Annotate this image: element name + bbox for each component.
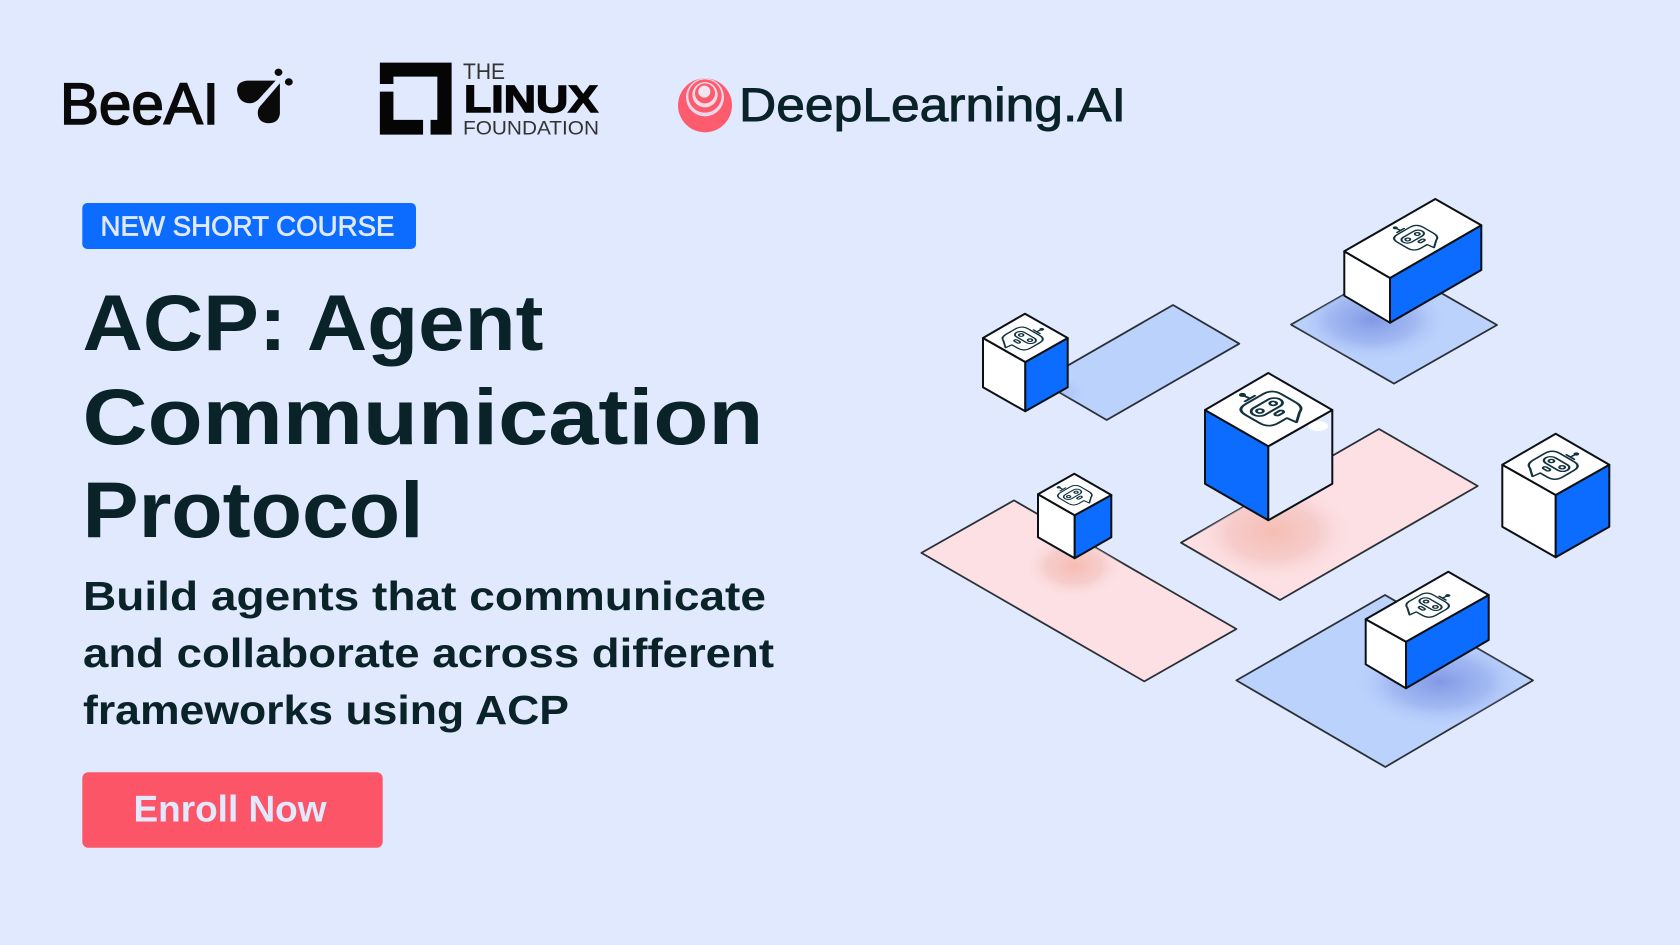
subtitle <box>83 573 774 733</box>
logo: The Linux Foundation <box>380 59 599 140</box>
DeepLearning.AI wordmark: DeepLearning.AI <box>739 78 1126 131</box>
title: ACP: Agent <box>82 278 544 367</box>
icon: DeepLearning circles <box>678 78 732 132</box>
title <box>82 278 764 554</box>
logo: BeeAI <box>60 69 293 137</box>
text: LINUX: LINUX <box>464 79 599 121</box>
logo: DeepLearning.AI <box>678 78 1126 132</box>
subtitle: Build agents that communicate <box>83 573 766 619</box>
icon: robot <box>1519 444 1590 486</box>
badge: new short course: NEW SHORT COURSE <box>100 211 394 242</box>
illustration: isometric agent blocks <box>921 199 1609 767</box>
plane: blue top left <box>1059 304 1240 421</box>
title: Protocol <box>82 465 424 554</box>
title: Communication <box>82 372 764 461</box>
plane: pink left <box>921 500 1236 681</box>
icon: robot <box>1049 480 1099 509</box>
icon: Linux Foundation square <box>380 63 452 135</box>
icon: robot <box>1398 587 1460 623</box>
subtitle: and collaborate across different <box>83 630 774 676</box>
plane: blue bottom <box>1236 595 1533 767</box>
cube: right <box>1502 434 1609 557</box>
box: bottom <box>1366 572 1489 688</box>
cube: small left <box>1038 474 1111 558</box>
cube: center large <box>1205 373 1332 520</box>
badge: new short course <box>82 203 416 249</box>
icon: robot <box>994 321 1053 355</box>
button: enroll now <box>82 772 383 848</box>
BeeAI wordmark: BeeAI <box>60 72 219 137</box>
button: enroll now: Enroll Now <box>134 789 327 830</box>
plane: pink center <box>1181 429 1478 600</box>
icon: robot <box>1383 219 1446 256</box>
icon: robot <box>1225 382 1313 433</box>
text: FOUNDATION: FOUNDATION <box>463 118 599 140</box>
icon: bee <box>237 69 293 123</box>
box: top right <box>1344 199 1481 323</box>
cube: top left <box>983 314 1068 411</box>
subtitle: frameworks using ACP <box>83 687 569 733</box>
text: THE: THE <box>463 59 505 84</box>
plane: blue top right <box>1290 293 1498 384</box>
